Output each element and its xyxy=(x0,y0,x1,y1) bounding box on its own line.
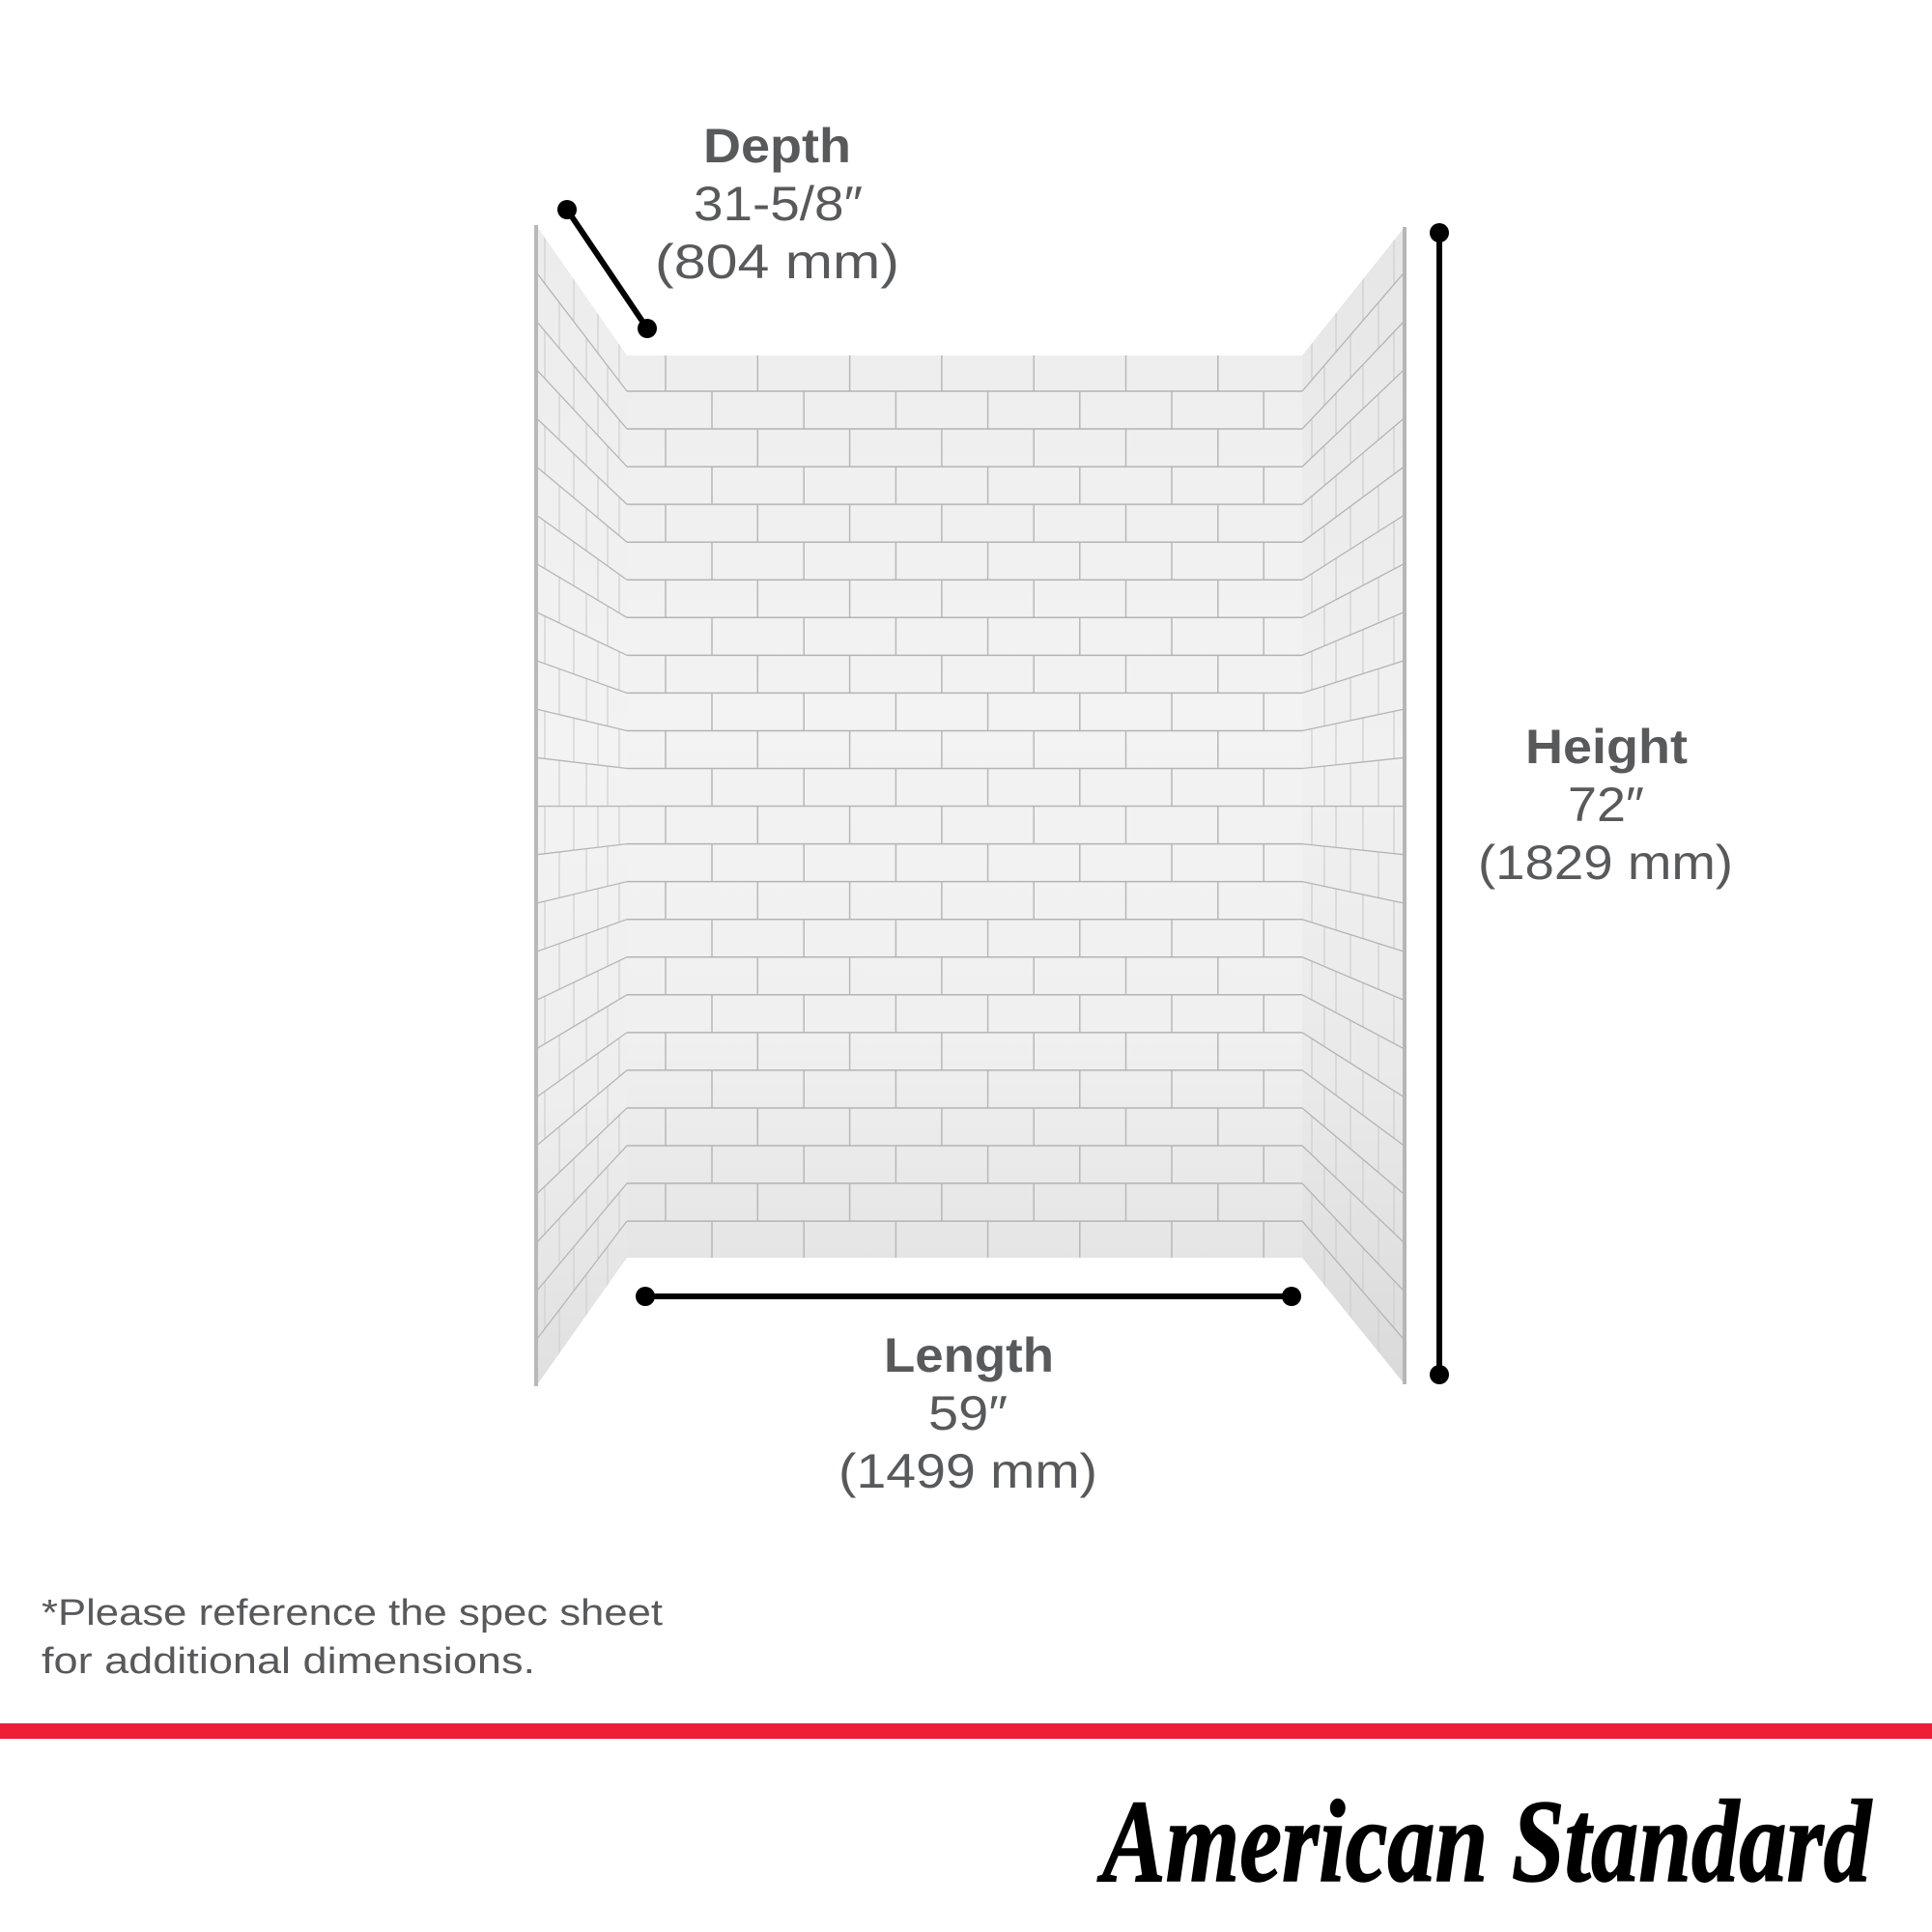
height measurement line xyxy=(1430,223,1449,1384)
length label: (1499 mm) xyxy=(838,1444,1097,1498)
length label: 59″ xyxy=(928,1386,1008,1440)
panel: left side wall xyxy=(534,225,627,1386)
panel: back wall xyxy=(627,354,1302,1259)
length label xyxy=(838,1328,1097,1498)
footnote xyxy=(42,1593,664,1682)
panel: right side wall xyxy=(1302,227,1406,1384)
red divider bar xyxy=(0,1723,1932,1739)
depth label: (804 mm) xyxy=(655,235,899,289)
depth measurement line xyxy=(557,200,657,338)
height label: Height xyxy=(1525,720,1688,774)
depth label: 31-5/8″ xyxy=(694,177,863,231)
height label: (1829 mm) xyxy=(1478,836,1733,890)
depth label xyxy=(655,119,899,289)
depth label: Depth xyxy=(703,119,851,173)
height label: 72″ xyxy=(1568,778,1644,832)
footnote: for additional dimensions. xyxy=(42,1641,535,1682)
height label xyxy=(1478,720,1733,890)
length measurement line xyxy=(636,1287,1301,1306)
length label: Length xyxy=(884,1328,1054,1382)
footnote: *Please reference the spec sheet xyxy=(42,1593,664,1634)
